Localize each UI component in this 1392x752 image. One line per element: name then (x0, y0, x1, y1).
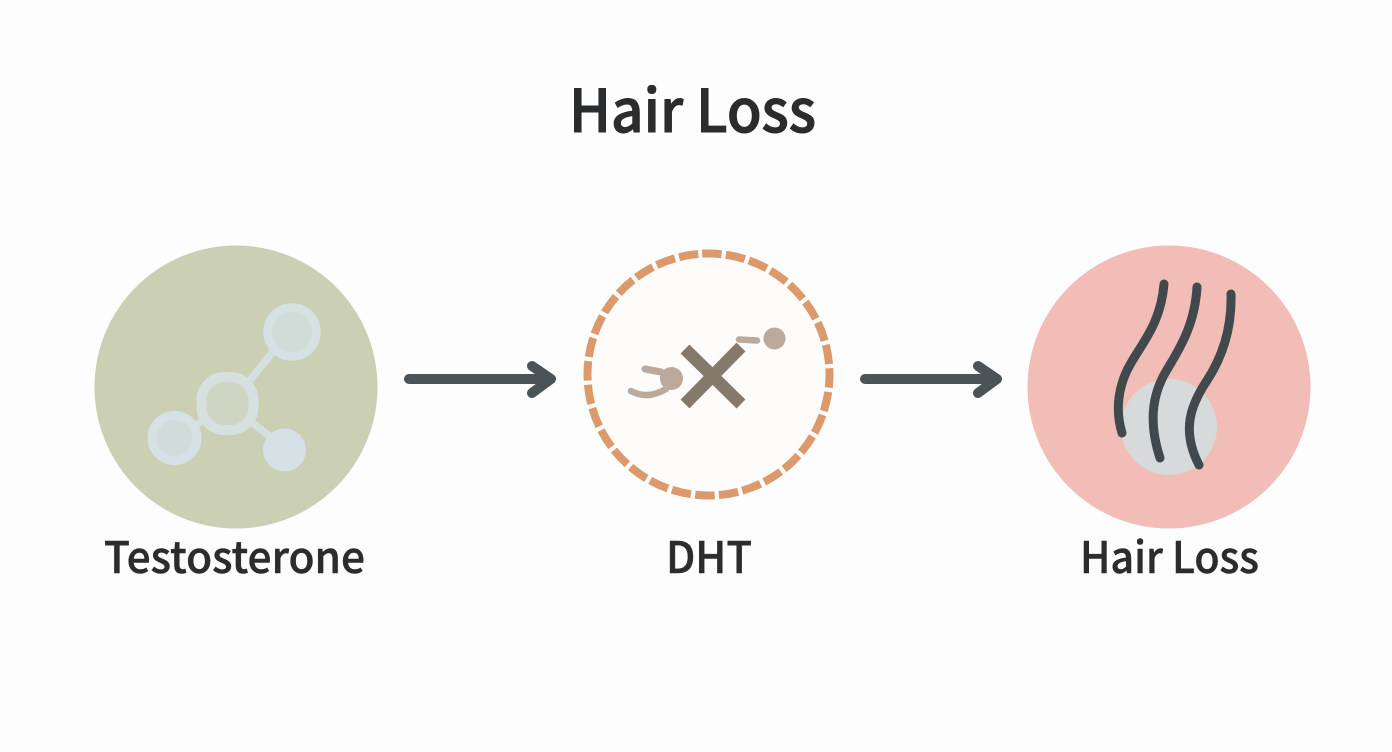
icon: blocked molecule (631, 328, 786, 404)
title: Hair Loss (569, 64, 816, 149)
circle: testosterone background (94, 246, 378, 528)
icon: hair strands (1118, 284, 1231, 465)
label: DHT: DHT (666, 523, 752, 586)
icon: molecule (152, 308, 316, 472)
icon: scalp patch (1121, 379, 1217, 475)
circle: dashed DHT ring (581, 247, 836, 502)
panel: testosterone (94, 246, 378, 528)
arrow: testosterone to DHT (409, 366, 551, 393)
circle: hair loss background (1028, 246, 1310, 528)
label: hair loss: Hair Loss (1080, 523, 1259, 586)
panel: DHT (581, 247, 836, 502)
label: testosterone: Testosterone (104, 523, 365, 586)
arrow: DHT to hair loss (865, 366, 997, 393)
panel: hair loss (1028, 246, 1310, 528)
